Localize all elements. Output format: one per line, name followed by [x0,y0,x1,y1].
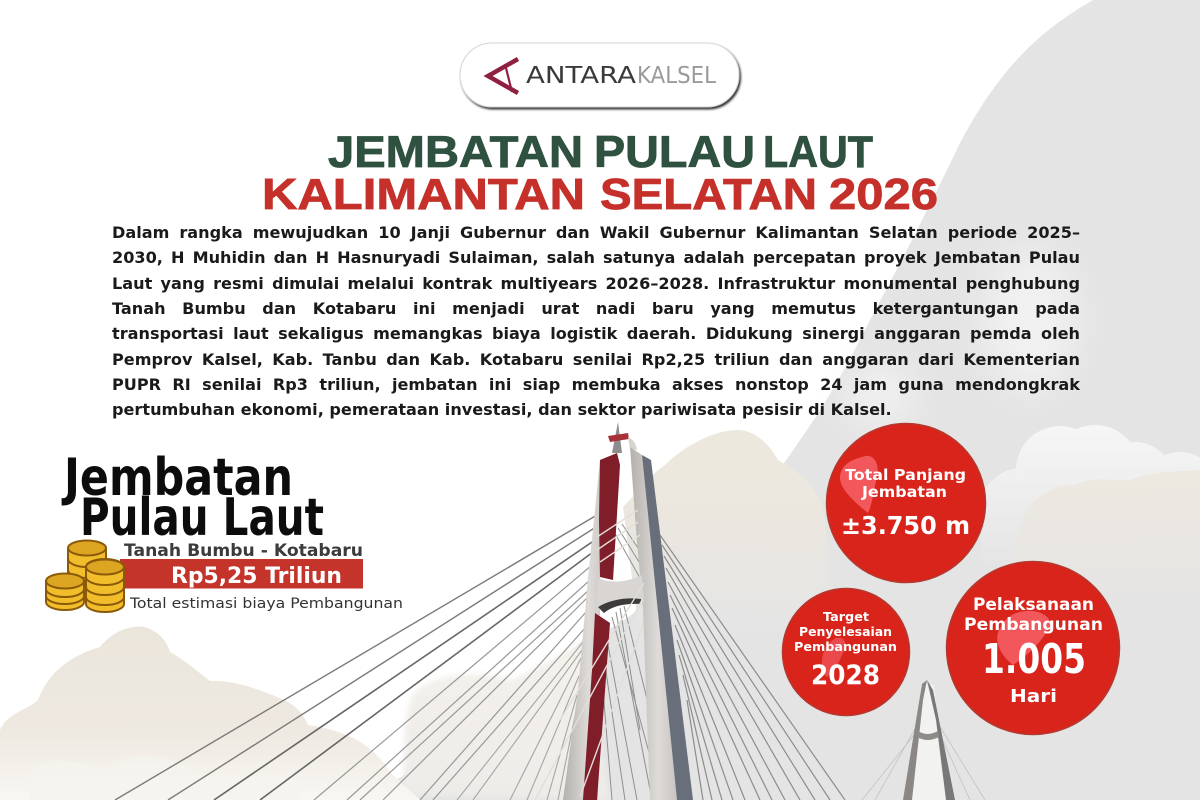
intro paragraph: 2030, H Muhidin dan H Hasnuryadi Sulaiman, salah satunya adalah percepatan proyek Jembatan Pulau [112,248,1080,267]
right leg slate face [642,455,693,800]
cloud: lower left shade [30,756,300,800]
cross beam [597,575,644,611]
intro paragraph: Pemprov Kalsel, Kab. Tanbu dan Kab. Kotabaru senilai Rp2,25 triliun dan anggaran dari Kementerian [112,350,1080,369]
bridge tower: main pylon [563,422,693,800]
distant tower left leg [903,680,927,800]
cables: light stays across pylon [535,510,644,800]
background: gray mountain [367,0,1200,800]
intro paragraph [112,223,1080,419]
distant tower stays [862,720,985,800]
highlight blob [997,611,1050,665]
stat circle: total length [826,424,986,582]
background: pale haze on mountain [845,250,1075,425]
title line one: LAUT [763,128,873,177]
tower spike and cap [612,422,622,453]
stat circle: completion target: Penyelesaian [799,624,892,639]
title line one: PULAU [594,128,755,177]
stat circle: total length: Jembatan [861,483,947,501]
intro paragraph: Tanah Bumbu dan Kotabaru ini menjadi urat nadi baru yang memutus ketergantungan pada [112,299,1080,318]
intro paragraph: transportasi laut sekaligus memangkas biaya logistik daerah. Didukung sinergi anggaran pemda oleh [112,324,1080,343]
cost bar [120,559,363,588]
cables: right fan [660,535,845,800]
title line two: SELATAN [600,170,817,219]
route label: Tanah Bumbu - Kotabaru [124,541,363,560]
cloud: right beige [1000,470,1200,612]
label: Target [823,609,869,624]
cost caption: Total estimasi biaya Pembangunan [129,596,403,612]
distant tower right leg [927,680,955,800]
intro paragraph: Dalam rangka mewujudkan 10 Janji Gubernur dan Wakil Gubernur Kalimantan Selatan periode 2025– [112,223,1080,242]
cables: far left fan [115,515,597,800]
unit: Hari [1010,686,1057,707]
left leg red face upper [599,453,620,580]
highlight blob [840,456,878,513]
stat circle: construction duration [946,562,1120,734]
value: ±3.750 m [841,511,970,540]
highlight blob [822,638,845,677]
intro paragraph: Laut yang resmi dimulai melalui kontrak multiyears 2026–2028. Infrastruktur monumental penghubung [112,274,1080,293]
logo pill [460,43,739,107]
stat circle: construction duration: Pembangunan [964,615,1103,634]
stat circle: completion target: Pembangunan [794,639,897,654]
label: Total Panjang [845,466,966,484]
distant tower beam [917,731,939,740]
stat circle: completion target [782,588,910,716]
title [262,128,938,219]
title line two: 2026 [829,170,938,219]
title line one: JEMBATAN [328,128,583,177]
cost block [46,448,403,612]
right leg light face [630,447,677,800]
left leg light face [563,458,606,800]
cost value: Rp5,25 Triliun [171,564,342,589]
intro paragraph: pertumbuhan ekonomi, pemerataan investasi, dan sektor pariwisata pesisir di Kalsel. [112,400,892,419]
intro paragraph: PUPR RI senilai Rp3 triliun, jembatan ini siap membuka akses nonstop 24 jam guna mendongkrak [112,375,1080,394]
distant tower inner [910,685,946,800]
small distant bridge tower [862,680,985,800]
value: 2028 [811,660,880,691]
cloud: upper right white [980,425,1200,575]
cost block: Pulau Laut [80,488,324,548]
cloud: lower center [402,642,610,800]
cloud: lower left [0,627,420,800]
logo mark [488,59,518,93]
icon: gold coins [46,540,124,612]
logo pill: KALSEL [637,63,716,89]
label: Pelaksanaan [973,595,1094,614]
cross beam shadow [598,598,641,613]
left leg red face lower [583,613,610,800]
pill background [460,43,739,107]
value: 1.005 [982,635,1086,683]
logo wordmark: ANTARA [526,63,636,89]
cloud: center beige [623,430,830,640]
cables: inner fan [603,524,672,800]
title line two: KALIMANTAN [262,170,585,219]
cost heading: Jembatan [62,448,293,508]
